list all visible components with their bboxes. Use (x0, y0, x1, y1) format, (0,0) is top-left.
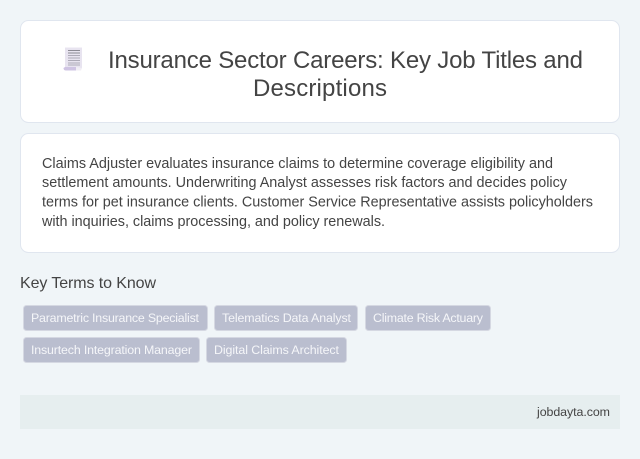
chip: Climate Risk Actuary (366, 306, 490, 330)
description text: Claims Adjuster evaluates insurance claims to determine coverage eligibility and (42, 156, 553, 172)
chip: Telematics Data Analyst: Telematics Data Analyst (222, 311, 352, 325)
description text: settlement amounts. Underwriting Analyst assesses risk factors and decides policy (42, 175, 568, 191)
description text: with inquiries, claims processing, and policy renewals. (41, 214, 385, 230)
description text: terms for pet insurance clients. Customer Service Representative assists policyholders (42, 194, 593, 210)
chip: Climate Risk Actuary: Climate Risk Actuary (373, 311, 484, 325)
panel: description (20, 134, 620, 252)
icon: policy document scroll (64, 48, 82, 70)
heading: key terms: Key Terms to Know (20, 275, 156, 292)
title text: Insurance Sector Careers: Key Job Titles and (108, 47, 583, 74)
chip: Digital Claims Architect (206, 338, 346, 362)
chip: Digital Claims Architect: Digital Claims Architect (214, 343, 340, 357)
footer bar (20, 395, 620, 429)
chip: Parametric Insurance Specialist (24, 306, 208, 330)
chip: Telematics Data Analyst (214, 306, 358, 330)
panel: title card (20, 20, 620, 122)
chip: Parametric Insurance Specialist: Parametric Insurance Specialist (31, 311, 200, 325)
chip: Insurtech Integration Manager (24, 338, 200, 362)
footer text: jobdayta.com (536, 405, 610, 419)
description text (41, 156, 593, 230)
title text (108, 47, 583, 102)
title text: Descriptions (253, 75, 387, 102)
chip: Insurtech Integration Manager: Insurtech Integration Manager (31, 343, 192, 357)
chip group: key terms (24, 306, 490, 362)
